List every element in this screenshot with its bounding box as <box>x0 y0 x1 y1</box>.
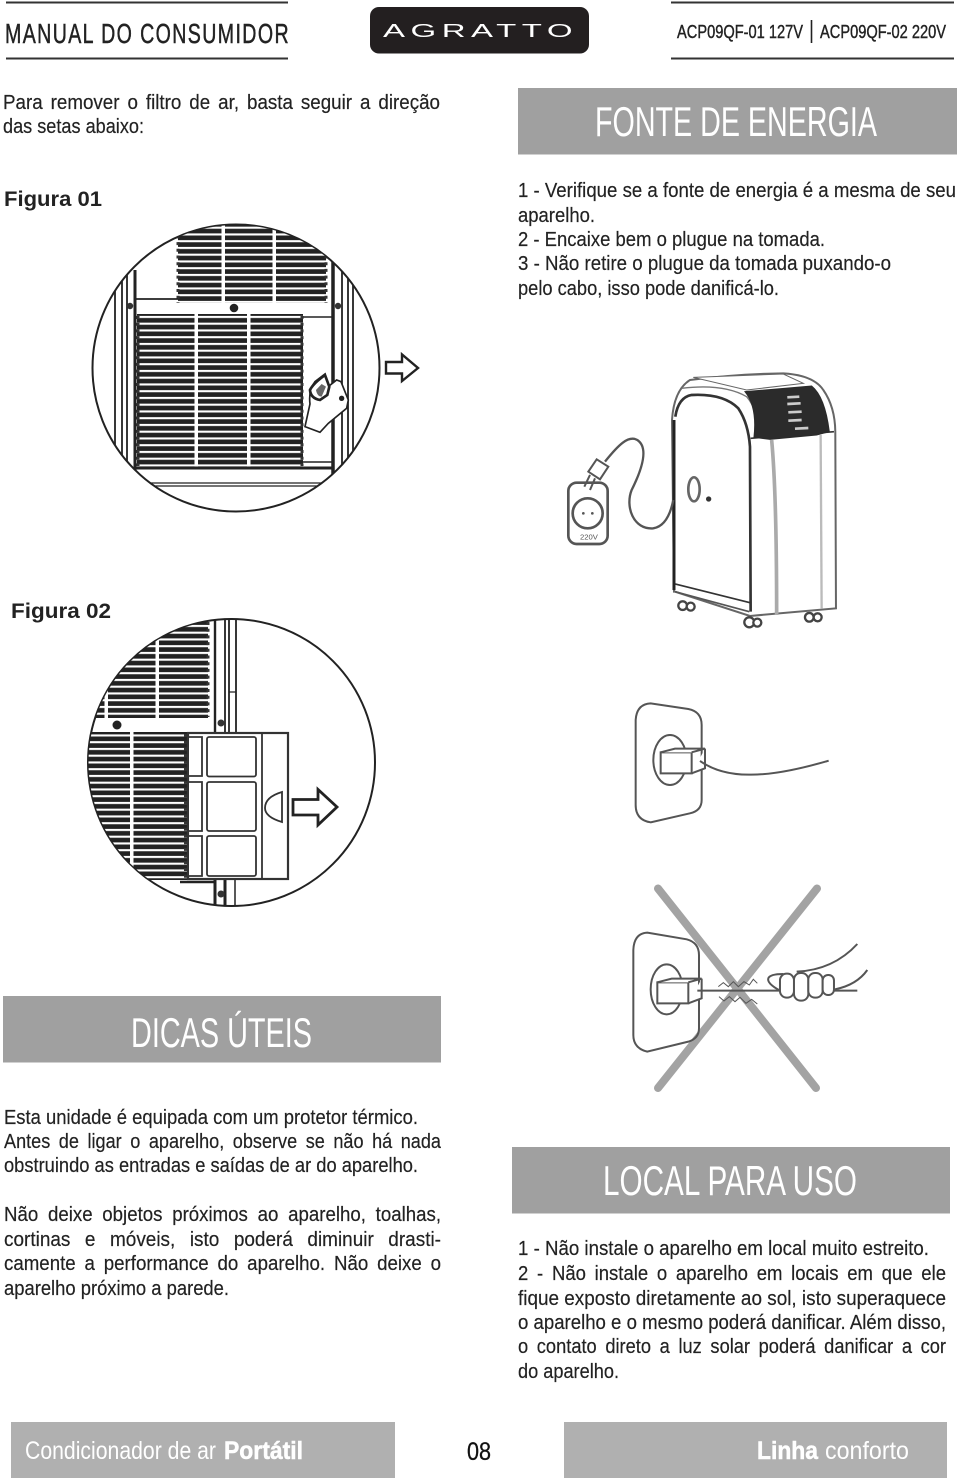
icon: hand <box>305 374 348 432</box>
text: useful tips: obstruindo as entradas e saídas de ar do aparelho. <box>4 1154 418 1177</box>
text: place of use: 1 - Não instale o aparelho em local muito estreito. <box>518 1237 929 1260</box>
text: power source steps: 2 - Encaixe bem o plugue na tomada. <box>518 228 825 251</box>
figure 01: air filter grille with hand <box>92 222 418 512</box>
logo: Agratto <box>370 7 589 54</box>
panel heading: LOCAL PARA USO <box>512 1147 950 1214</box>
icon: cross <box>658 888 817 1088</box>
illustration: do not pull by the cord <box>633 888 867 1088</box>
figure 02: air filter sliding out <box>70 615 375 906</box>
filter frame <box>188 733 288 879</box>
text: filter removal intro: Para remover o filtro de ar, basta seguir a direção <box>3 91 440 114</box>
page number: 08 <box>467 1438 491 1466</box>
icon: AC unit body <box>672 373 836 627</box>
icon: socket and hand pulling cord <box>633 933 867 1052</box>
header: model numbers: ACP09QF-01 127V <box>677 22 803 42</box>
text: power source steps: aparelho. <box>518 204 595 227</box>
text: useful tips: camente a performance do aparelho. Não deixe o <box>4 1252 441 1275</box>
heading: Figura 02: Figura 02 <box>11 600 111 623</box>
icon: plug <box>588 459 608 479</box>
footer bar: product <box>11 1422 395 1478</box>
footer bar: product: Portátil <box>224 1437 303 1465</box>
panel heading: DICAS ÚTEIS: DICAS ÚTEIS <box>131 1009 312 1056</box>
text: filter removal intro <box>3 91 440 138</box>
text: useful tips: Esta unidade é equipada com um protetor térmico. <box>4 1106 418 1129</box>
text: place of use: do aparelho. <box>518 1360 619 1383</box>
footer bar: line: conforto <box>825 1437 909 1465</box>
text: power source steps: pelo cabo, isso pode danificá-lo. <box>518 277 779 300</box>
footer bar: product: Condicionador de ar <box>25 1437 216 1465</box>
icon: power cord <box>605 439 673 528</box>
text: useful tips: Antes de ligar o aparelho, observe se não há nada <box>4 1130 442 1153</box>
text: place of use <box>518 1237 946 1383</box>
header: model numbers <box>671 2 954 58</box>
text: useful tips: Não deixe objetos próximos ao aparelho, toalhas, <box>4 1203 441 1226</box>
arrow: figure 02 <box>293 790 337 825</box>
panel heading: FONTE DE ENERGIA <box>518 88 957 154</box>
illustration: portable air conditioner with socket <box>568 373 836 627</box>
text: filter removal intro: das setas abaixo: <box>3 115 144 138</box>
footer bar: line: Linha <box>757 1437 819 1465</box>
text: power source steps: 3 - Não retire o plugue da tomada puxando-o <box>518 252 891 275</box>
arrow: figure 01 <box>386 354 418 381</box>
panel heading: LOCAL PARA USO: LOCAL PARA USO <box>603 1157 857 1204</box>
text: useful tips: aparelho próximo a parede. <box>4 1277 229 1300</box>
logo: Agratto: AGRATTO <box>383 21 578 41</box>
text: useful tips: cortinas e móveis, isto poderá diminuir drasti- <box>4 1228 441 1251</box>
text: power source steps <box>518 179 956 300</box>
heading: Figura 01: Figura 01 <box>4 188 102 211</box>
text: useful tips <box>4 1106 442 1300</box>
icon: wall socket: 220V <box>580 532 599 541</box>
footer bar: line <box>564 1422 947 1478</box>
header: manual title: MANUAL DO CONSUMIDOR <box>5 18 290 49</box>
icon: wall socket <box>568 475 608 544</box>
panel heading: DICAS ÚTEIS <box>3 996 441 1062</box>
illustration: correct plug <box>636 703 829 822</box>
